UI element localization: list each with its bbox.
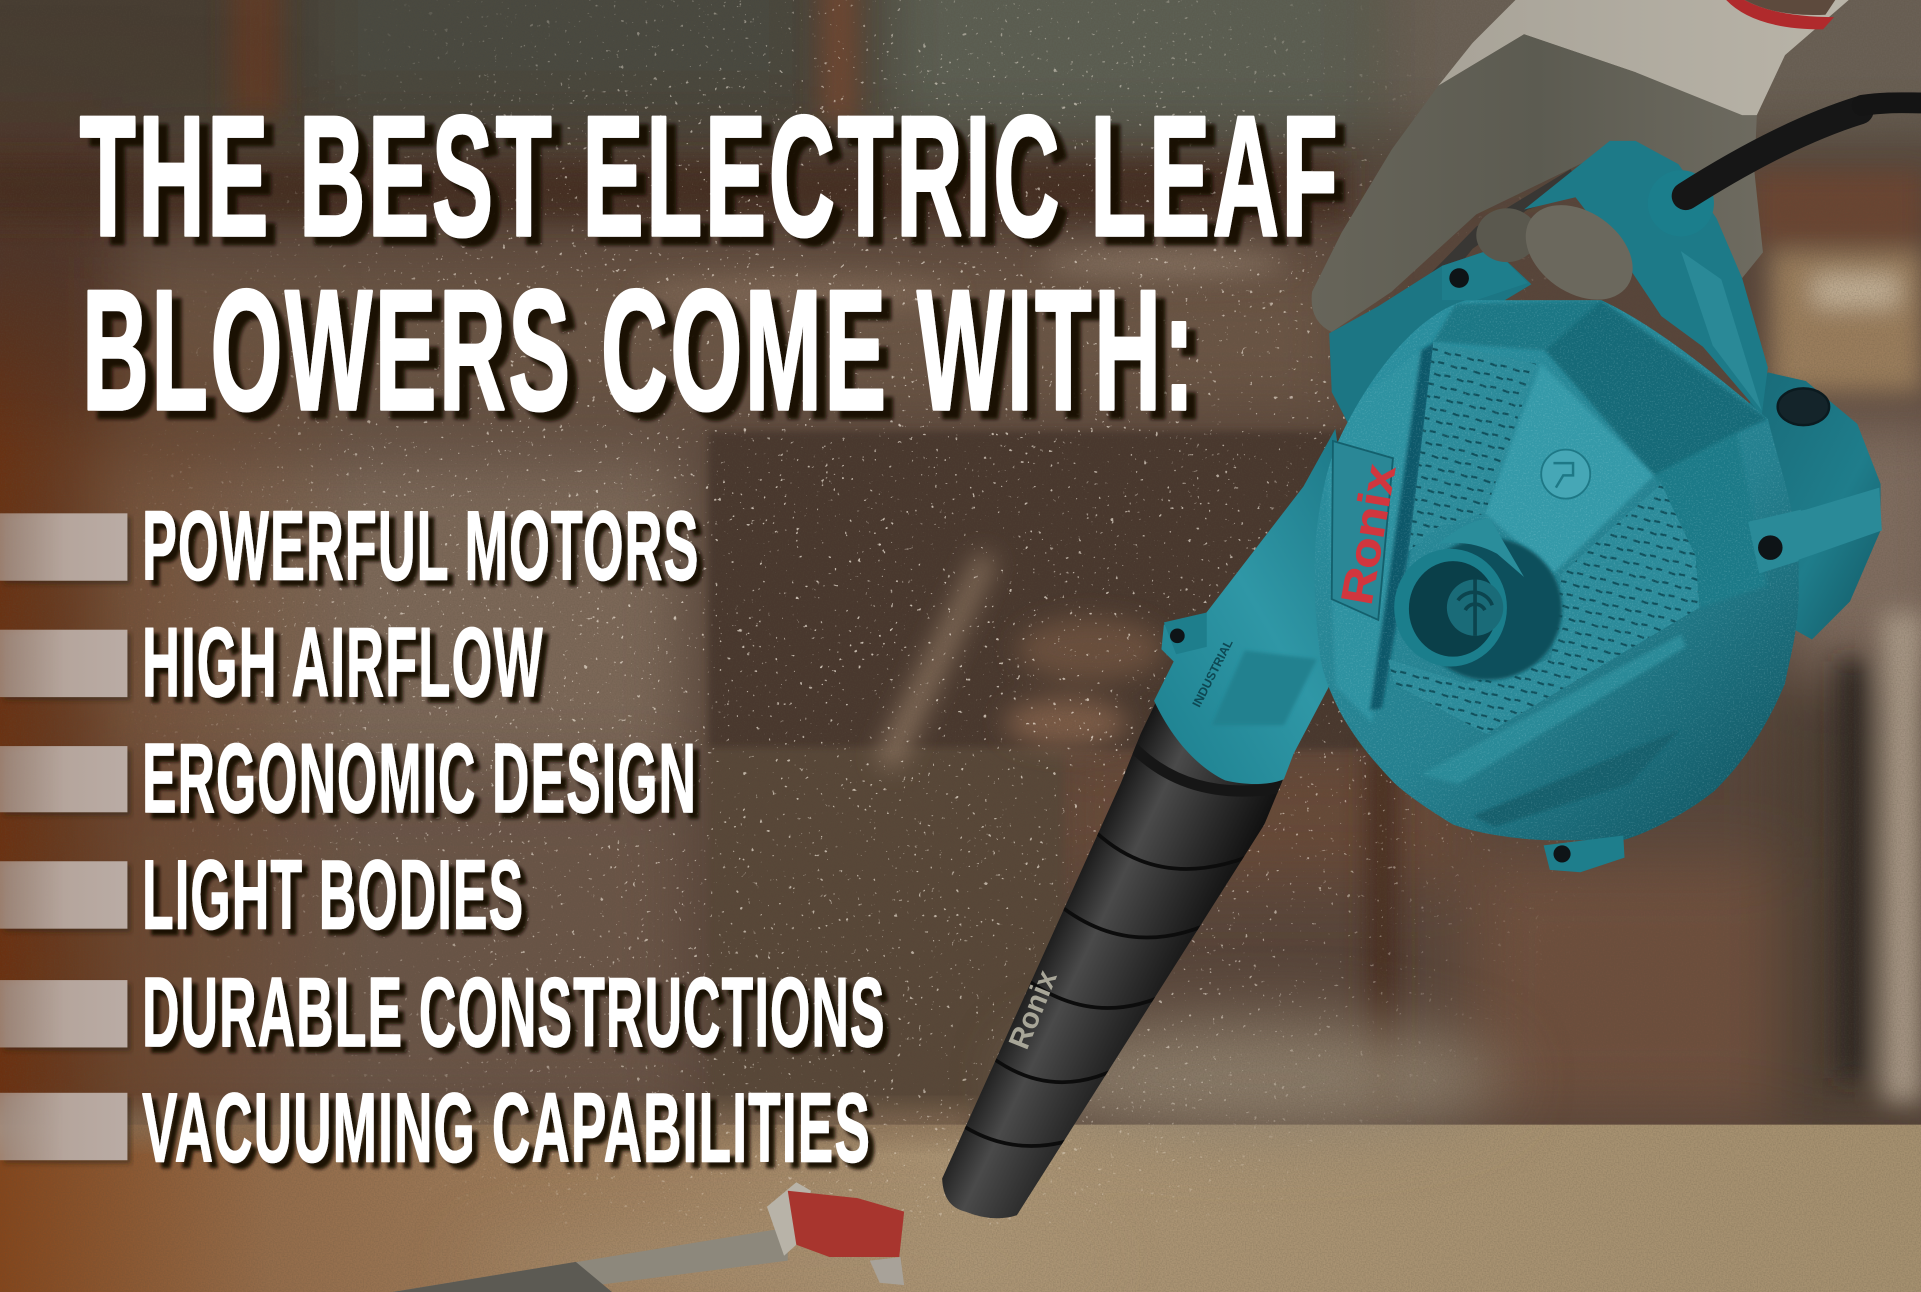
hammer on the table (390, 1182, 904, 1292)
brand plate (1332, 441, 1405, 620)
lower grooves (1421, 635, 1686, 827)
tube brand mark: Ronix (1003, 965, 1064, 1054)
dark strip (1370, 342, 1436, 711)
round icon badge (1541, 450, 1590, 499)
list labels: DURABLE CONSTRUCTIONS (142, 957, 886, 1067)
motor strap (1748, 488, 1882, 573)
title (80, 81, 1340, 446)
rear grip handle (1524, 141, 1768, 415)
feature list (0, 490, 886, 1182)
list labels: VACUUMING CAPABILITIES (142, 1072, 871, 1182)
right rim band (1656, 434, 1762, 586)
upper left face (1326, 350, 1421, 723)
list labels: HIGH AIRFLOW (142, 607, 544, 717)
motor vent hole (1778, 388, 1829, 425)
main disc body (1318, 300, 1798, 840)
list markers (0, 513, 127, 1160)
list labels: LIGHT BODIES (142, 840, 524, 950)
power cable (1686, 103, 1921, 196)
cable socket (1648, 170, 1714, 236)
textured grip panels (1409, 342, 1536, 551)
nozzle neck (1154, 429, 1360, 784)
brand plate: Ronix (1333, 460, 1405, 608)
hub and air inlet (1394, 518, 1562, 680)
screw lugs (1164, 249, 1801, 872)
table surface (0, 1125, 1921, 1292)
list labels: POWERFUL MOTORS (142, 490, 700, 600)
light centre face (1485, 364, 1654, 573)
glove fingers (1476, 186, 1651, 319)
list labels: ERGONOMIC DESIGN (142, 723, 697, 833)
list labels (142, 490, 886, 1182)
dark cabinet block (708, 431, 1492, 1115)
upper lug and shoulder (1329, 249, 1531, 423)
black nozzle tube (942, 701, 1299, 1218)
dark handle band (1378, 169, 1583, 321)
glove (1312, 0, 1849, 332)
industrial label: INDUSTRIAL (1190, 637, 1236, 709)
product: gloved hand holding teal blower (942, 0, 1921, 1218)
dark upper rim band (1545, 300, 1768, 475)
motor housing back (1740, 372, 1881, 640)
